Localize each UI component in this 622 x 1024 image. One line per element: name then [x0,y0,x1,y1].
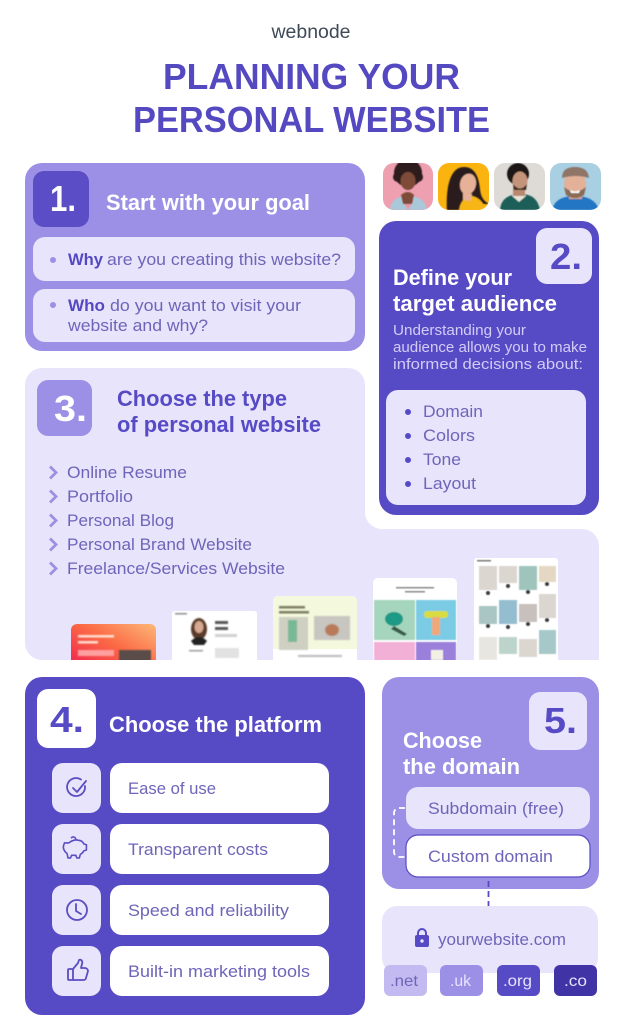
option: custom domain [406,835,590,877]
step 2 number badge: 2. [550,236,582,277]
thumbnail: resume [71,624,156,660]
step 2 list: Tone [423,450,461,469]
question: who: Who [68,296,105,315]
avatar 4 [550,163,601,210]
question: why [33,237,355,281]
criterion: transparent costs [52,824,329,874]
criterion: marketing tools: Built-in marketing tools [128,962,310,981]
logo: webnode: webnode [270,22,350,43]
dashed connector to url [488,881,490,907]
step 5 number badge: 5. [544,700,577,741]
criterion: ease of use [52,763,329,813]
step 1 number badge [33,171,89,227]
step 3 number badge [37,380,92,436]
step 3 heading: Choose the type [117,386,287,411]
question: why: are you creating this website? [107,250,341,269]
option: custom domain: Custom domain [428,847,553,866]
title: PERSONAL WEBSITE [133,99,490,140]
step 4 number badge: 4. [50,699,84,740]
panel: step 2 audience [379,221,599,515]
panel: step 3 website type [25,368,599,674]
question: why: Why [68,250,104,269]
criterion: ease of use: Ease of use [128,779,216,798]
step 2 heading: target audience [393,291,557,316]
step 4 heading: Choose the platform [109,712,322,737]
panel: step 5 domain [382,677,599,889]
website types list: Personal Blog [67,511,174,530]
question: who: do you want to visit your [110,296,301,315]
step 2 heading [393,265,557,316]
panel: step 1 goal [25,163,365,351]
avatar 2 [438,163,489,210]
step 5 heading: Choose [403,728,482,753]
icon: lock [415,929,429,947]
option: subdomain: Subdomain (free) [428,799,564,818]
step 4 number badge [37,689,96,748]
question: who: website and why? [67,316,208,335]
url text: yourwebsite.com [438,930,566,949]
thumbnail: colorful portfolio [373,578,457,668]
title: PLANNING YOUR [163,56,460,97]
website types list: Personal Brand Website [67,535,252,554]
criterion: marketing tools [52,946,329,996]
website types list: Freelance/Services Website [67,559,285,578]
domain extension: .uk: .uk [450,973,472,990]
panel: url bar [382,906,598,973]
step 5 heading [403,728,520,779]
step 2 description: Understanding your [393,322,526,339]
icon: check circle [67,778,86,796]
step 2 list: Domain [423,402,483,421]
domain extension: .co: .co [564,973,587,990]
step 2 list: Layout [423,474,476,493]
step 1 number badge: 1. [50,178,76,219]
option: subdomain [406,787,590,829]
website types list: Portfolio [67,487,133,506]
dashed connector between options [394,808,405,857]
domain extension: .org: .org [503,973,532,990]
title [133,56,490,140]
step 3 heading: of personal website [117,412,321,437]
criterion: transparent costs: Transparent costs [128,840,268,859]
step 3 heading [117,386,321,437]
icon: thumbs up [68,960,88,980]
avatar 3 [494,163,545,210]
step 2 description [393,322,587,373]
website types list: Online Resume [67,463,187,482]
thumbnail: profile [172,611,257,660]
domain extension: .uk [440,965,483,996]
step 2 number badge [536,228,592,284]
website template thumbnails [71,558,558,660]
domain extension: .net [384,965,427,996]
icon: clock [67,900,87,920]
step 5 number badge [529,692,587,750]
thumbnail: dog grooming [273,596,357,666]
step 2 description: audience allows you to make [393,339,587,356]
step 2 heading: Define your [393,265,512,290]
step 2 list [386,390,586,505]
domain extension: .net: .net [390,973,419,990]
thumbnail: gallery grid [474,558,558,668]
step 3 number badge: 3. [54,388,87,429]
avatar 1 [383,159,433,210]
domain extension: .org [497,965,540,996]
website types list [50,463,285,578]
criterion: speed and reliability [52,885,329,935]
step 2 description: informed decisions about: [393,356,583,373]
domain extension: .co [554,965,597,996]
step 5 heading: the domain [403,754,520,779]
step 2 list: Colors [423,426,475,445]
step 1 heading: Start with your goal [106,190,310,215]
icon: piggy bank [63,837,86,858]
criterion: speed and reliability: Speed and reliability [128,901,290,920]
avatars row [383,159,601,210]
question: who [33,289,355,342]
panel: step 4 platform [25,677,365,1015]
